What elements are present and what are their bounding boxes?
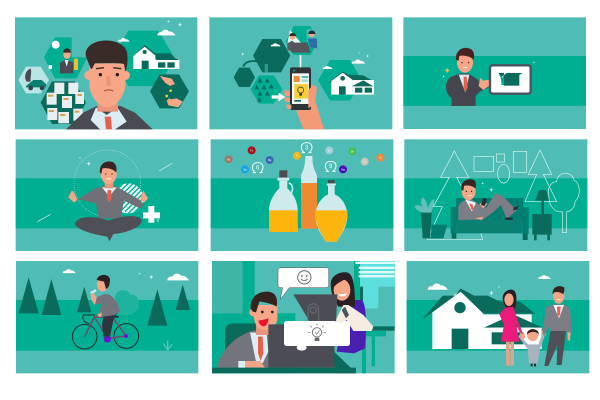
icon: plus five: 5	[157, 218, 160, 223]
callout: idea bubble	[284, 321, 350, 346]
icon: coloured nutrient dots: Mn	[351, 151, 355, 153]
panel: cyclist drinking water	[16, 261, 198, 373]
figure: man in grey suit	[542, 286, 572, 366]
icon: sparkles	[442, 61, 535, 77]
icon: back laptop	[293, 294, 337, 325]
icon: grass	[163, 341, 172, 350]
callout: smiley speech bubble	[278, 268, 329, 299]
figure: meditating man	[68, 162, 148, 241]
icon: sparkles	[481, 182, 494, 192]
icon: chair back	[225, 323, 262, 368]
icon: omega labels: 3	[305, 145, 309, 151]
icon: sofa	[451, 198, 529, 240]
icon: hand holding phone	[284, 67, 324, 129]
icon: bills hexagon	[41, 81, 86, 124]
icon: large house	[422, 288, 543, 349]
icon: coloured nutrient dots: Cu	[379, 158, 383, 160]
figure: reclining man	[458, 179, 518, 220]
icon: coloured nutrient dots: Ca	[363, 162, 367, 164]
figure: child	[518, 329, 546, 366]
icon: desk	[343, 331, 386, 373]
icon: plus five	[143, 206, 160, 223]
panel: man worried by costs	[15, 17, 197, 129]
decorative circle dashed	[74, 150, 141, 217]
panel: family in front of house	[407, 261, 589, 373]
icon: tablet with box	[490, 65, 531, 94]
icon: striped circle	[118, 183, 143, 214]
icon: side table and lamp	[532, 190, 552, 240]
icon: man with money hexagon	[44, 37, 87, 78]
figure: presenting man	[446, 48, 493, 106]
icon: sparkles and lines	[37, 157, 172, 222]
icon: house hexagon	[318, 52, 374, 101]
icon: forest hexagon	[251, 75, 282, 104]
figure: cyclist	[72, 275, 139, 349]
chart: tall bottle	[301, 156, 317, 229]
panel: man presenting box	[403, 17, 586, 129]
figure: worried man	[66, 40, 153, 129]
icon: coloured nutrient dots: Zn	[328, 150, 331, 152]
icon: house hexagon	[112, 20, 182, 86]
icon: coloured nutrient dots: Mg	[268, 160, 272, 162]
outline: wall shapes	[427, 150, 579, 239]
icon: people hexagon	[286, 26, 318, 55]
icon: coloured nutrient dots: K	[296, 156, 298, 158]
panel: man relaxing on sofa	[404, 139, 587, 251]
icon: pine trees	[19, 277, 190, 326]
icon: coloured nutrient dots: Mg	[243, 169, 247, 171]
icon: plant pot	[415, 197, 447, 238]
icon: broken down car hexagon	[18, 67, 49, 93]
icon: coloured nutrient dots	[225, 146, 384, 173]
arrow: link to phone	[300, 55, 301, 68]
icon: coloured nutrient dots: Fe	[250, 150, 254, 152]
panel: two people at laptops	[212, 261, 395, 373]
arrow: forest to phone	[272, 93, 285, 101]
figure: woman in pink dress	[499, 290, 524, 366]
icon: coloured nutrient dots: Na	[227, 159, 231, 161]
icon: clouds and stars	[428, 275, 551, 295]
icon: bush	[115, 290, 139, 315]
icon: omega labels: 6	[256, 165, 260, 171]
panel: smartphone and hexagons	[209, 17, 392, 129]
chart: round bottle	[315, 180, 347, 242]
icon: window with blinds	[354, 261, 395, 331]
icon: coloured nutrient dots: Mg	[341, 169, 345, 171]
panel: meditating man	[16, 139, 198, 251]
panel: oil bottles with omega labels	[211, 139, 393, 251]
chart: jug bottle	[269, 170, 298, 232]
figure: man	[217, 292, 277, 368]
icon: front laptop	[212, 324, 357, 373]
icon: omega labels	[252, 143, 336, 173]
figure: woman	[331, 272, 373, 353]
icon: dark network hexagons	[234, 39, 290, 87]
icon: hand dropping coins hexagon	[150, 74, 189, 108]
icon: omega labels: 9	[329, 164, 333, 170]
icon: clouds and stars	[63, 269, 189, 280]
